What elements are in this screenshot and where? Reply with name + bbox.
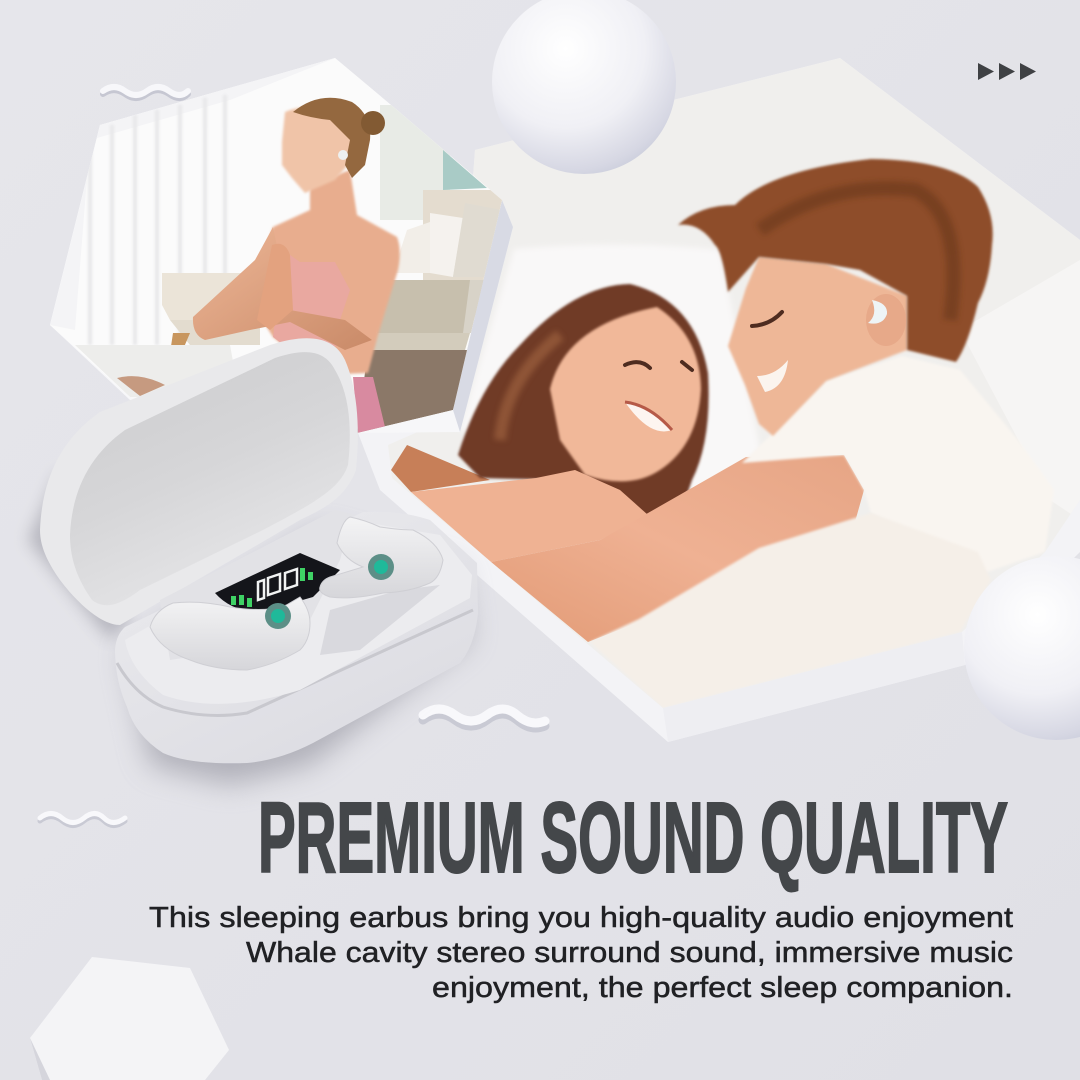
earbud front — [150, 597, 310, 670]
woman face — [550, 307, 701, 481]
man's hair — [678, 159, 993, 362]
squiggle left — [40, 814, 125, 826]
display — [215, 553, 340, 613]
icon: earbud in ear — [868, 300, 887, 324]
man's hand — [391, 445, 490, 492]
earbud back — [320, 517, 443, 598]
text block: description: This sleeping earbus bring you high-quality audio enjoyment — [149, 902, 1013, 934]
man's shirt — [742, 356, 1054, 572]
pillow — [464, 247, 757, 488]
text block: description: enjoyment, the perfect sleep companion. — [432, 972, 1013, 1004]
sphere top — [492, 0, 676, 174]
product: earbud charging case — [28, 338, 478, 785]
floor — [357, 350, 470, 433]
squiggle centre — [423, 709, 545, 728]
case base — [115, 512, 478, 763]
case lid — [40, 338, 358, 625]
man's arm — [491, 455, 864, 642]
icon: three arrows top right — [978, 63, 1036, 80]
hexagon decoration bottom left — [30, 957, 229, 1080]
blanket — [590, 516, 856, 641]
woman — [193, 98, 400, 433]
squiggle top left — [103, 87, 188, 98]
sphere right — [964, 556, 1080, 740]
panel: yoga photo — [50, 50, 520, 450]
woman neck and arm — [411, 470, 648, 562]
text block: description — [149, 902, 1013, 1004]
case shadow — [125, 530, 470, 785]
text block: description: Whale cavity stereo surround sound, immersive music — [246, 937, 1013, 969]
woman hair — [458, 284, 709, 516]
panel: couple photo — [358, 50, 1080, 750]
man face — [728, 257, 907, 436]
sofa — [423, 190, 502, 280]
